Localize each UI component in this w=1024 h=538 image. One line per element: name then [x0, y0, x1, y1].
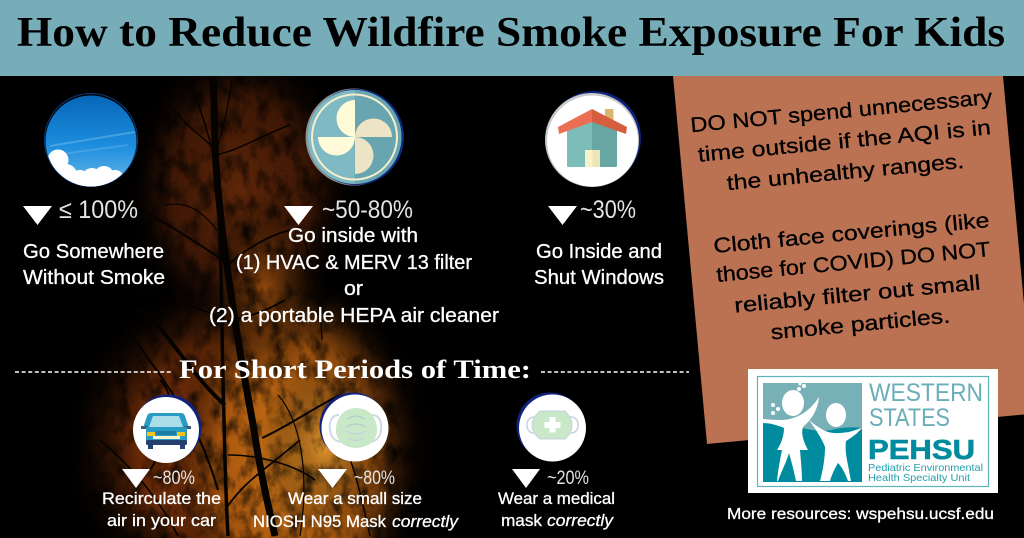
stat: 80 percent: ~80%: [153, 468, 195, 489]
icon: down arrow: [284, 206, 313, 225]
label: [534, 241, 664, 289]
icon: down arrow: [548, 206, 577, 225]
label: [209, 225, 499, 327]
option: N95 mask: [253, 392, 460, 531]
logo text: Pediatric Environmental: [868, 462, 983, 474]
icon: down arrow: [318, 469, 347, 488]
logo artwork: two children: [763, 382, 862, 482]
background: wildfire and tree silhouettes: [83, 76, 418, 538]
warning text: AQI: [689, 86, 994, 195]
label: [23, 241, 165, 289]
stat: 80 percent: ~80%: [354, 468, 395, 489]
warning text: cloth face coverings: Cloth face coverings (like: [712, 209, 990, 258]
warning text: AQI: the unhealthy ranges.: [726, 150, 965, 195]
warning text: cloth face coverings: smoke particles.: [770, 305, 951, 344]
title banner: [0, 0, 1024, 76]
label: Shut Windows: [534, 267, 664, 289]
label: air in your car: [107, 511, 216, 530]
label: Go inside with: [288, 225, 418, 247]
icon: down arrow: [122, 469, 150, 488]
label: Wear a medical: [498, 489, 615, 508]
label: Without Smoke: [23, 267, 165, 289]
label: Go Inside and: [536, 241, 662, 263]
label: mask: [501, 511, 542, 530]
option: HVAC or HEPA: [209, 88, 499, 327]
option: go somewhere without smoke: [23, 94, 165, 289]
option: go inside and shut windows: [534, 91, 664, 289]
section heading: for short periods of time: For Short Periods of Time:: [179, 355, 531, 384]
icon: fan: [306, 88, 404, 186]
warning text: AQI: DO NOT spend unnecessary: [689, 86, 994, 137]
stat: 20 percent: ~20%: [547, 468, 589, 489]
logo text: [868, 379, 983, 484]
stat: 30 percent: ~30%: [580, 196, 636, 224]
label: Recirculate the: [102, 489, 221, 508]
option: recirculate car air: [102, 394, 221, 530]
label: Go Somewhere: [23, 241, 164, 263]
logo: Western States PEHSU: [748, 369, 998, 493]
resources link text: More resources: wspehsu.ucsf.edu: [727, 506, 994, 523]
label: NIOSH N95 Mask: [253, 512, 386, 531]
icon: medical mask: [516, 392, 586, 462]
icon: N95 mask: [320, 392, 388, 462]
label: Wear a small size: [288, 489, 422, 508]
warning text: cloth face coverings: reliably filter out small: [733, 271, 981, 318]
warning text: cloth face coverings: [712, 209, 992, 344]
label: or: [344, 278, 363, 300]
icon: blue sky: [44, 93, 138, 187]
icon: down arrow: [23, 206, 52, 225]
label: correctly: [392, 512, 460, 531]
warning text: AQI: time outside if the AQI is in: [697, 116, 992, 167]
label: [498, 489, 615, 530]
option: medical mask: [498, 392, 615, 530]
icon: down arrow: [512, 469, 540, 488]
label: (2) a portable HEPA air cleaner: [209, 305, 499, 327]
label: [102, 489, 221, 530]
stat: 50 to 80 percent: ~50-80%: [322, 196, 413, 224]
label: [253, 489, 460, 531]
logo text: Health Specialty Unit: [868, 472, 970, 484]
stat: up to 100 percent: ≤ 100%: [59, 196, 138, 224]
logo text: WESTERN: [869, 379, 983, 407]
warning text: cloth face coverings: those for COVID) DO NOT: [715, 238, 992, 287]
label: correctly: [547, 511, 615, 530]
label: (1) HVAC & MERV 13 filter: [236, 252, 472, 274]
title: How to Reduce Wildfire Smoke Exposure For Kids: [17, 10, 1005, 56]
panel: warnings: [673, 76, 1024, 444]
logo text: PEHSU: [868, 434, 975, 465]
icon: car: [133, 394, 202, 463]
logo text: STATES: [869, 404, 950, 432]
icon: house: [545, 91, 641, 187]
